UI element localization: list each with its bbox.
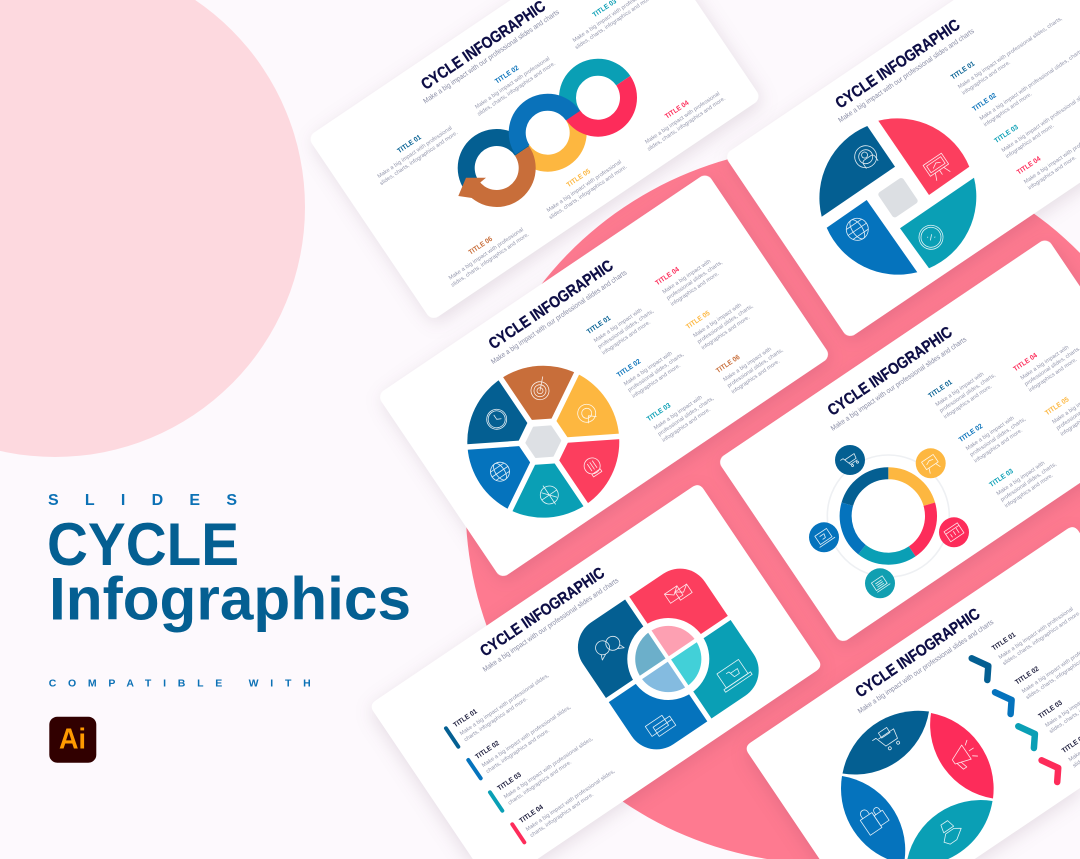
pale pink circle [0, 0, 305, 457]
icon: target person [850, 141, 881, 172]
donut chart [827, 455, 949, 577]
icon: megaphone [948, 740, 980, 771]
text: title 04: infographics and more. [1027, 155, 1078, 192]
text: title 02 [1014, 628, 1080, 701]
icon: Adobe Illustrator: Ai [59, 724, 86, 756]
quadrant square chart [566, 557, 770, 761]
text: title 03: charts, infographics and more. [507, 759, 573, 807]
text: title 06: professional slides, charts, [726, 347, 785, 389]
text: title 01: infographics and more. [961, 60, 1012, 97]
text: title 02: Make a big impact with professional [474, 56, 551, 111]
text: title 01: Make a big impact with professional slides, [459, 673, 551, 737]
text: title 04: Make a big impact with professional [644, 91, 721, 146]
text: title 04: Make a big impact with professional slides, [525, 768, 617, 833]
heading: CYCLE INFOGRAPHIC [853, 605, 984, 701]
text: title 03: professional slides, charts, [657, 396, 716, 438]
text: title 02: infographics and more. [983, 91, 1034, 128]
text: title 04: infographics and more. [670, 271, 721, 308]
icon: shopping bags [856, 801, 890, 835]
linked rings chart [443, 44, 652, 222]
text: title 02: TITLE 02 [972, 92, 998, 113]
text: title 03: TITLE 03 [989, 468, 1015, 489]
subheading: Make a big impact with our professional slides and charts [481, 575, 620, 674]
text: title 04: Make a big impact with [662, 259, 712, 295]
text: title 01: slides, charts, infographics and more. [379, 130, 460, 187]
text: title 01: Make a big impact with professional slides, charts, [957, 16, 1064, 90]
marker: bar 01 [446, 728, 458, 747]
heading: infographics: Infographics [49, 566, 411, 632]
six-segment pie chart [433, 329, 654, 554]
text: title 03: TITLE 03 [497, 772, 523, 792]
text: title 04: TITLE 04 [519, 804, 545, 825]
icon: Adobe Illustrator [49, 717, 96, 763]
text: title 04: professional slides, charts, [666, 260, 724, 302]
icon: globe [487, 459, 513, 485]
icon: compass [536, 481, 563, 509]
text: title 02: slides, charts, infographics and more. [477, 61, 557, 118]
panel: rounded square slide [372, 485, 820, 859]
text: title 01: TITLE 01 [928, 379, 954, 400]
text: title 02: charts, infographics and more. [485, 728, 551, 775]
text: title 04: TITLE 04 [664, 100, 690, 121]
text: title 03: TITLE 03 [994, 124, 1020, 145]
icon: presentation board [923, 153, 953, 182]
subheading: Make a big impact with our professional slides and charts [836, 26, 976, 124]
text: title 02: TITLE 02 [958, 423, 984, 444]
text: title 06: TITLE 06 [468, 236, 494, 257]
icon: envelopes [664, 581, 692, 606]
text: title 02: infographics and more. [631, 363, 682, 400]
text: title 01: TITLE 01 [396, 134, 423, 155]
icon: clock [483, 405, 511, 433]
marker: bar 04 [512, 824, 524, 842]
text: title 03: infographics and more. [661, 407, 712, 444]
heading: CYCLE INFOGRAPHIC [833, 16, 964, 112]
text: title 01: infographics and more. [943, 383, 994, 420]
text: title 05: Make a big impact with [692, 302, 743, 339]
text: title 02: professional slides, charts, [969, 416, 1028, 458]
panel: petal star slide [747, 527, 1080, 859]
panel: hexagon pie slide [377, 172, 831, 579]
arrow: chevron 03 [1018, 726, 1035, 748]
text: title 01 [991, 594, 1080, 667]
text: title 01: Make a big impact with [593, 307, 644, 344]
text: title 06: Make a big impact with professional [448, 227, 525, 282]
icon: hand [935, 817, 965, 846]
text: title 05: TITLE 05 [685, 310, 712, 331]
panel: linked rings slide [308, 0, 762, 321]
text: title 04: infographics and more. [1028, 357, 1079, 394]
panel: donut ring slide [717, 237, 1080, 644]
subheading: Make a big impact with our professional slides and charts [829, 334, 968, 433]
text: title 06: infographics and more. [731, 358, 782, 395]
text: title 05 [1044, 374, 1080, 438]
text: title 01: TITLE 01 [453, 708, 479, 729]
petal star chart [841, 711, 994, 859]
label: compatible with: COMPATIBLE WITH [49, 678, 311, 690]
text: title 04: TITLE 04 [655, 266, 681, 287]
text: title 05: TITLE 05 [566, 168, 592, 189]
text: title 02 [958, 401, 1032, 465]
node: documents [865, 568, 895, 598]
text: title 04: TITLE 04 [1016, 156, 1042, 176]
text: title 02: infographics and more. [973, 427, 1024, 464]
text: title 06: slides, charts, infographics and more. [450, 232, 531, 289]
text: title 04 [1013, 330, 1080, 394]
text: title 01 [586, 293, 660, 357]
text: title 01: infographics and more. [601, 319, 652, 356]
text: title 03: TITLE 03 [646, 402, 672, 423]
pinwheel pie chart [819, 118, 976, 275]
node: chart [939, 517, 969, 547]
text: title 05: TITLE 05 [1044, 396, 1071, 417]
text: title 05: slides, charts, infographics and more. [548, 164, 629, 221]
text: title 03 [646, 380, 720, 444]
heading: slides: SLIDES [48, 492, 237, 509]
text: title 02: TITLE 02 [1014, 666, 1041, 686]
text: title 03: infographics and more. [1005, 123, 1056, 160]
arrow: chevron 04 [1042, 760, 1058, 782]
text: title 06: Make a big impact with [722, 346, 773, 383]
icon: target [527, 377, 553, 403]
text: title 01: professional slides, charts, [597, 308, 656, 350]
text: title 01: slides, charts, infographics and more. [1002, 610, 1080, 667]
icon: chat bubbles [593, 632, 624, 662]
text: title 01: Make a big impact with [935, 371, 985, 408]
text: title 03 [1038, 662, 1080, 735]
large pink circle [466, 146, 1080, 859]
text: title 01: charts, infographics and more. [463, 696, 529, 743]
icon: globe pin [842, 214, 873, 245]
text: title 03: professional slides, charts, [1000, 461, 1058, 503]
icon: gear [574, 401, 599, 426]
icon: cart [871, 725, 902, 755]
arrow: chevron 01 [972, 658, 988, 680]
text: title 03: Make a big impact with [653, 395, 704, 431]
node: laptop [809, 522, 839, 552]
text: title 03: TITLE 03 [1038, 700, 1064, 720]
text: title 01 [928, 357, 1001, 421]
text: title 01: TITLE 01 [586, 315, 612, 336]
text: title 02: professional slides, charts, [627, 352, 686, 394]
icon: credit cards [645, 712, 676, 740]
panel: quarter pie slide [724, 0, 1080, 339]
text: title 02: TITLE 02 [494, 65, 520, 86]
heading: cycle: CYCLE [47, 511, 239, 578]
text: title 02: TITLE 02 [475, 740, 501, 761]
text: title 04 [1061, 697, 1080, 770]
text: title 04: slides, charts, infographics and more. [647, 96, 727, 153]
text: title 03 [989, 446, 1062, 510]
text: title 05: professional slides, charts, [696, 303, 755, 345]
text: title 06 [715, 332, 789, 396]
heading: CYCLE INFOGRAPHIC [477, 564, 608, 660]
text: title 01: Make a big impact with professional [377, 125, 453, 180]
subheading: Make a big impact with our professional slides and charts [489, 268, 629, 366]
heading: CYCLE INFOGRAPHIC [486, 257, 617, 353]
icon: percent button [914, 221, 948, 254]
node: cart [835, 445, 865, 475]
text: title 04: Make a big impact with [1020, 345, 1070, 381]
arrow: chevron 02 [995, 692, 1012, 714]
text: title 03: Make a big impact with [996, 460, 1046, 497]
text: title 05: infographics and more. [701, 314, 752, 351]
text: title 06: TITLE 06 [715, 354, 742, 375]
heading: CYCLE INFOGRAPHIC [825, 324, 956, 420]
icon: laptop cart [714, 658, 752, 692]
marker: bar 03 [490, 792, 502, 811]
text: title 02 [616, 336, 690, 400]
marker: bar 02 [468, 760, 481, 778]
text: title 04: TITLE 04 [1013, 352, 1039, 373]
text: title 05 [685, 288, 759, 352]
text: title 02: Make a big impact with [623, 351, 674, 387]
text: title 03: infographics and more. [1004, 472, 1055, 509]
text: title 01: Make a big impact with professional [998, 606, 1075, 661]
text: title 01: TITLE 01 [950, 61, 976, 81]
text: title 03: Make a big impact with professional slides, [503, 736, 595, 800]
node: board [916, 448, 946, 478]
text: title 04 [655, 244, 728, 308]
text: title 02: TITLE 02 [616, 358, 642, 379]
text: title 02: Make a big impact with [965, 415, 1016, 452]
text: title 04: charts, infographics and more. [529, 792, 595, 839]
icon: mic [581, 455, 604, 479]
text: title 02: Make a big impact with professional slides, [481, 704, 573, 769]
text: title 01: professional slides, charts, [939, 372, 997, 414]
text: title 05: Make a big impact with professional [546, 159, 623, 214]
subheading: Make a big impact with our professional slides and charts [856, 617, 995, 715]
text: title 01: TITLE 01 [991, 632, 1017, 652]
